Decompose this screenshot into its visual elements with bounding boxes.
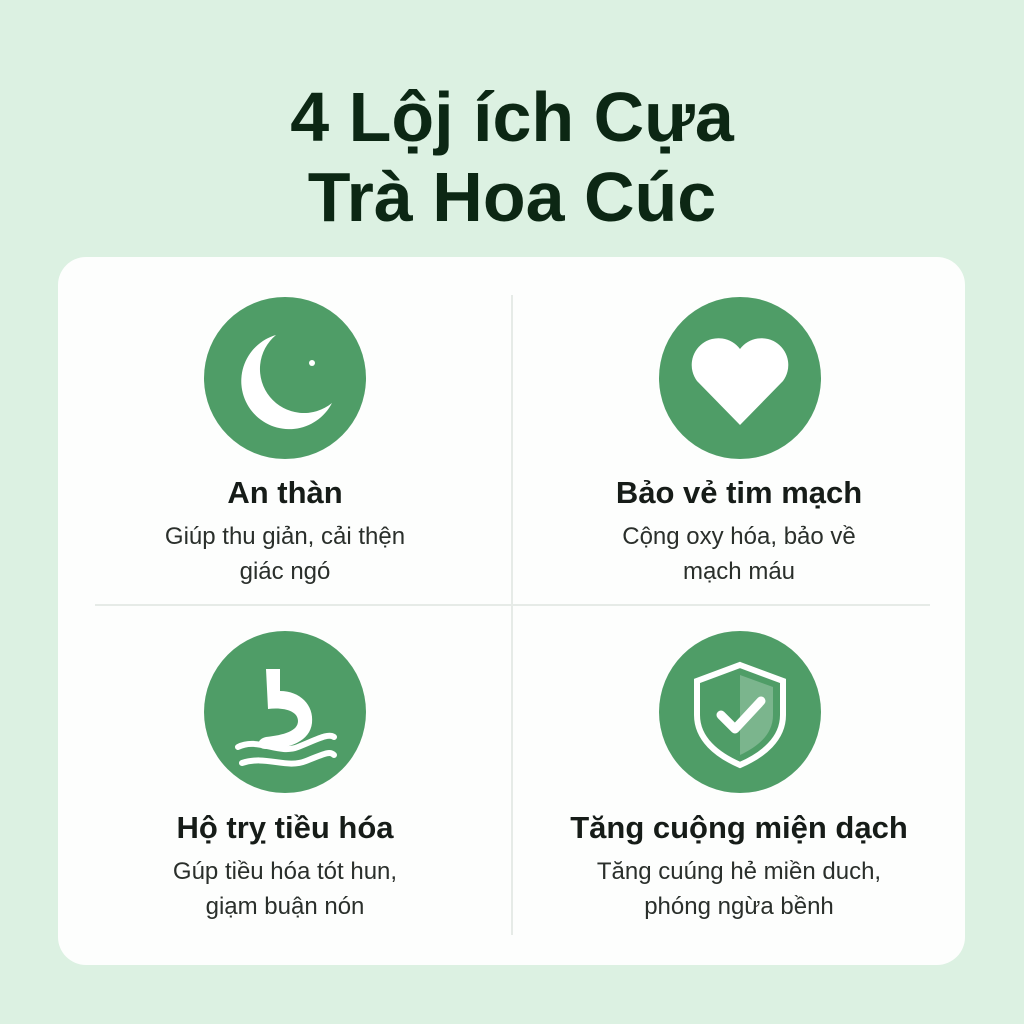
- text: mien dich: phóng ngừa bềnh: [644, 893, 834, 920]
- text: mien dich: Tăng cuúng hẻ miền duch,: [597, 858, 881, 885]
- title: [290, 78, 734, 236]
- card: [58, 257, 965, 965]
- title: Trà Hoa Cúc: [308, 158, 716, 236]
- text: tieu hoa: [173, 858, 397, 920]
- heading: mien dich: Tăng cuộng miện dạch: [570, 810, 908, 845]
- text: an than: [165, 523, 405, 585]
- text: tim mach: mạch máu: [683, 558, 795, 585]
- heading: tim mach: Bảo vẻ tim mạch: [616, 475, 862, 510]
- icon: shield: [659, 631, 821, 793]
- title: 4 Lộj ích Cựa: [290, 78, 734, 156]
- text: tieu hoa: giạm buận nón: [206, 893, 364, 920]
- text: tim mach: [622, 523, 856, 585]
- text: tieu hoa: Gúp tiều hóa tót hun,: [173, 858, 397, 885]
- heading: tieu hoa: Hộ trỵ tiều hóa: [176, 810, 394, 845]
- icon: moon: [204, 297, 366, 459]
- text: an than: giác ngó: [240, 558, 330, 585]
- text: mien dich: [597, 858, 881, 920]
- text: tim mach: Cộng oxy hóa, bảo về: [622, 523, 856, 550]
- text: an than: Giúp thu giản, cải thện: [165, 523, 405, 550]
- icon: heart: [659, 297, 821, 459]
- heading: an than: An thàn: [227, 475, 343, 510]
- icon: stomach: [204, 631, 366, 793]
